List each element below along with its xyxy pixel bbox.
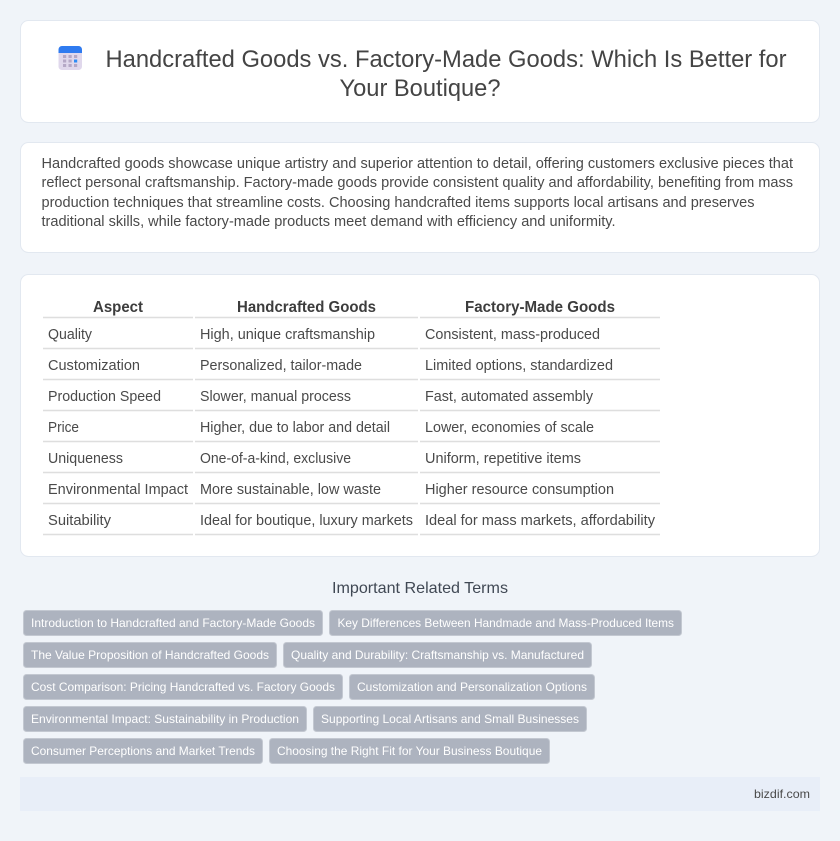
tag: Consumer Perceptions and Market Trends: [31, 744, 255, 758]
row: customization: Limited options, standardized: [425, 358, 613, 374]
row: environmental impact: More sustainable, low waste: [200, 482, 381, 498]
description text: Handcrafted goods showcase unique artistry and superior attention to detail, offering customers exclusive pieces that: [42, 156, 793, 172]
row: production speed: Fast, automated assembly: [425, 389, 594, 405]
row: environmental impact: [48, 482, 614, 498]
row: customization: Personalized, tailor-made: [200, 358, 362, 374]
table rules: [43, 318, 660, 534]
row: environmental impact: Higher resource consumption: [425, 482, 614, 498]
description text: production techniques that streamline costs. Choosing handcrafted items supports local artisans and preserves: [42, 195, 755, 211]
row: environmental impact: Environmental Impact: [48, 482, 188, 498]
row: suitability: Ideal for mass markets, affordability: [425, 513, 656, 529]
title: [106, 46, 787, 102]
table header: [93, 299, 615, 316]
tag: [284, 642, 592, 668]
footer: bizdif.com: [754, 787, 810, 801]
row: suitability: Ideal for boutique, luxury markets: [200, 513, 413, 529]
panel: title card: [20, 20, 820, 122]
tag: Choosing the Right Fit for Your Business Boutique: [277, 744, 542, 758]
row: quality: Consistent, mass-produced: [425, 327, 600, 343]
description text: reflect personal craftsmanship. Factory-made goods provide consistent quality and affordability, benefiting from mass: [42, 175, 793, 191]
tags: related terms: [24, 610, 682, 764]
panel: description: [20, 142, 820, 252]
row: quality: High, unique craftsmanship: [200, 327, 375, 343]
tag: Quality and Durability: Craftsmanship vs. Manufactured: [291, 648, 584, 662]
tag: [24, 706, 306, 732]
title: Your Boutique?: [340, 75, 500, 102]
tag: [24, 674, 342, 700]
row: suitability: Suitability: [48, 513, 112, 529]
tag: [330, 610, 682, 636]
title: Handcrafted Goods vs. Factory-Made Goods: Which Is Better for: [106, 46, 787, 73]
table header: Handcrafted Goods: [237, 299, 376, 316]
row: price: [48, 420, 594, 436]
tag: Environmental Impact: Sustainability in Production: [31, 712, 299, 726]
tag: [314, 706, 586, 732]
heading: related terms: Important Related Terms: [332, 580, 508, 597]
tag: [24, 610, 322, 636]
tag: Customization and Personalization Options: [357, 680, 587, 694]
tag: Cost Comparison: Pricing Handcrafted vs. Factory Goods: [31, 680, 335, 694]
table header: Factory-Made Goods: [465, 299, 615, 316]
row: uniqueness: [48, 451, 581, 467]
row: uniqueness: One-of-a-kind, exclusive: [200, 451, 351, 467]
row: price: Price: [48, 420, 79, 436]
row: uniqueness: Uniqueness: [48, 451, 123, 467]
tag: [350, 674, 594, 700]
description text: traditional skills, while factory-made products meet demand with efficiency and uniformity.: [42, 214, 616, 230]
tag: [24, 738, 262, 764]
row: price: Lower, economies of scale: [425, 420, 594, 436]
row: production speed: Production Speed: [48, 389, 161, 405]
tag: The Value Proposition of Handcrafted Goods: [31, 648, 269, 662]
description text: [42, 156, 793, 230]
row: price: Higher, due to labor and detail: [200, 420, 390, 436]
row: customization: Customization: [48, 358, 140, 374]
panel: comparison table: [20, 274, 820, 556]
tag: Supporting Local Artisans and Small Businesses: [321, 712, 579, 726]
icon: calendar: [58, 46, 82, 70]
tag: Introduction to Handcrafted and Factory-Made Goods: [31, 616, 315, 630]
row: customization: [48, 358, 613, 374]
table header: Aspect: [93, 299, 144, 316]
row: production speed: Slower, manual process: [200, 389, 351, 405]
row: uniqueness: Uniform, repetitive items: [425, 451, 581, 467]
tag: [24, 642, 276, 668]
row: quality: Quality: [48, 327, 93, 343]
tag: [270, 738, 550, 764]
footer: [20, 777, 820, 811]
row: quality: [48, 327, 600, 343]
row: suitability: [48, 513, 656, 529]
tag: Key Differences Between Handmade and Mass-Produced Items: [338, 616, 674, 630]
row: production speed: [48, 389, 594, 405]
